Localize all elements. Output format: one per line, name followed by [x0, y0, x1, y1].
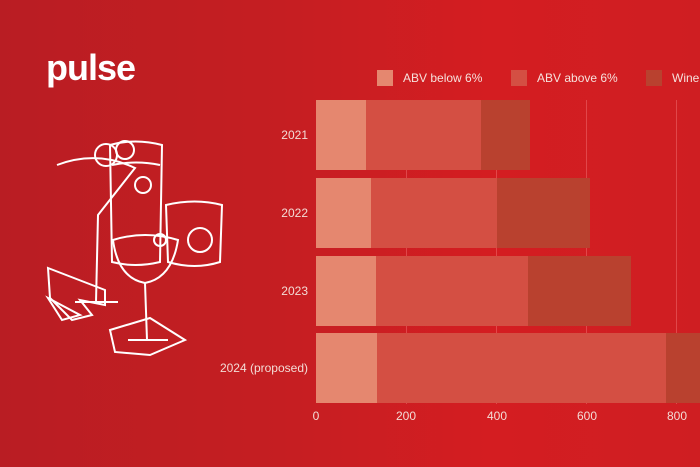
illustration: cocktail glasses: [45, 140, 223, 356]
x axis labels: 400: [487, 409, 507, 423]
tall glass: [95, 141, 162, 265]
x axis labels: 800: [667, 409, 687, 423]
x axis labels: 200: [396, 409, 416, 423]
x axis labels: [313, 409, 687, 423]
x axis labels: 600: [577, 409, 597, 423]
y labels: [220, 128, 308, 375]
legend item: ABV below 6%: ABV below 6%: [403, 71, 482, 85]
bar 2023: [316, 256, 631, 326]
legend: [377, 70, 699, 86]
y labels: 2021: [281, 128, 308, 142]
tumbler: [166, 202, 222, 266]
bar 2022: [316, 178, 590, 248]
y labels: 2024 (proposed): [220, 361, 308, 375]
legend item: ABV above 6%: ABV above 6%: [537, 71, 618, 85]
martini glass: [57, 158, 151, 302]
legend item: Wine: Wine: [672, 71, 699, 85]
coupe glass: [113, 234, 178, 340]
bar 2021: [316, 100, 530, 170]
y labels: 2023: [281, 284, 308, 298]
bar 2024: [316, 333, 700, 403]
legend item: ABV below 6%: [377, 70, 482, 86]
legend item: Wine: [646, 70, 699, 86]
y labels: 2022: [281, 206, 308, 220]
x axis labels: 0: [313, 409, 319, 423]
legend item: ABV above 6%: [511, 70, 618, 86]
logo: pulse: pulse: [46, 47, 135, 88]
napkins: [48, 268, 185, 355]
bar chart: [316, 100, 700, 403]
